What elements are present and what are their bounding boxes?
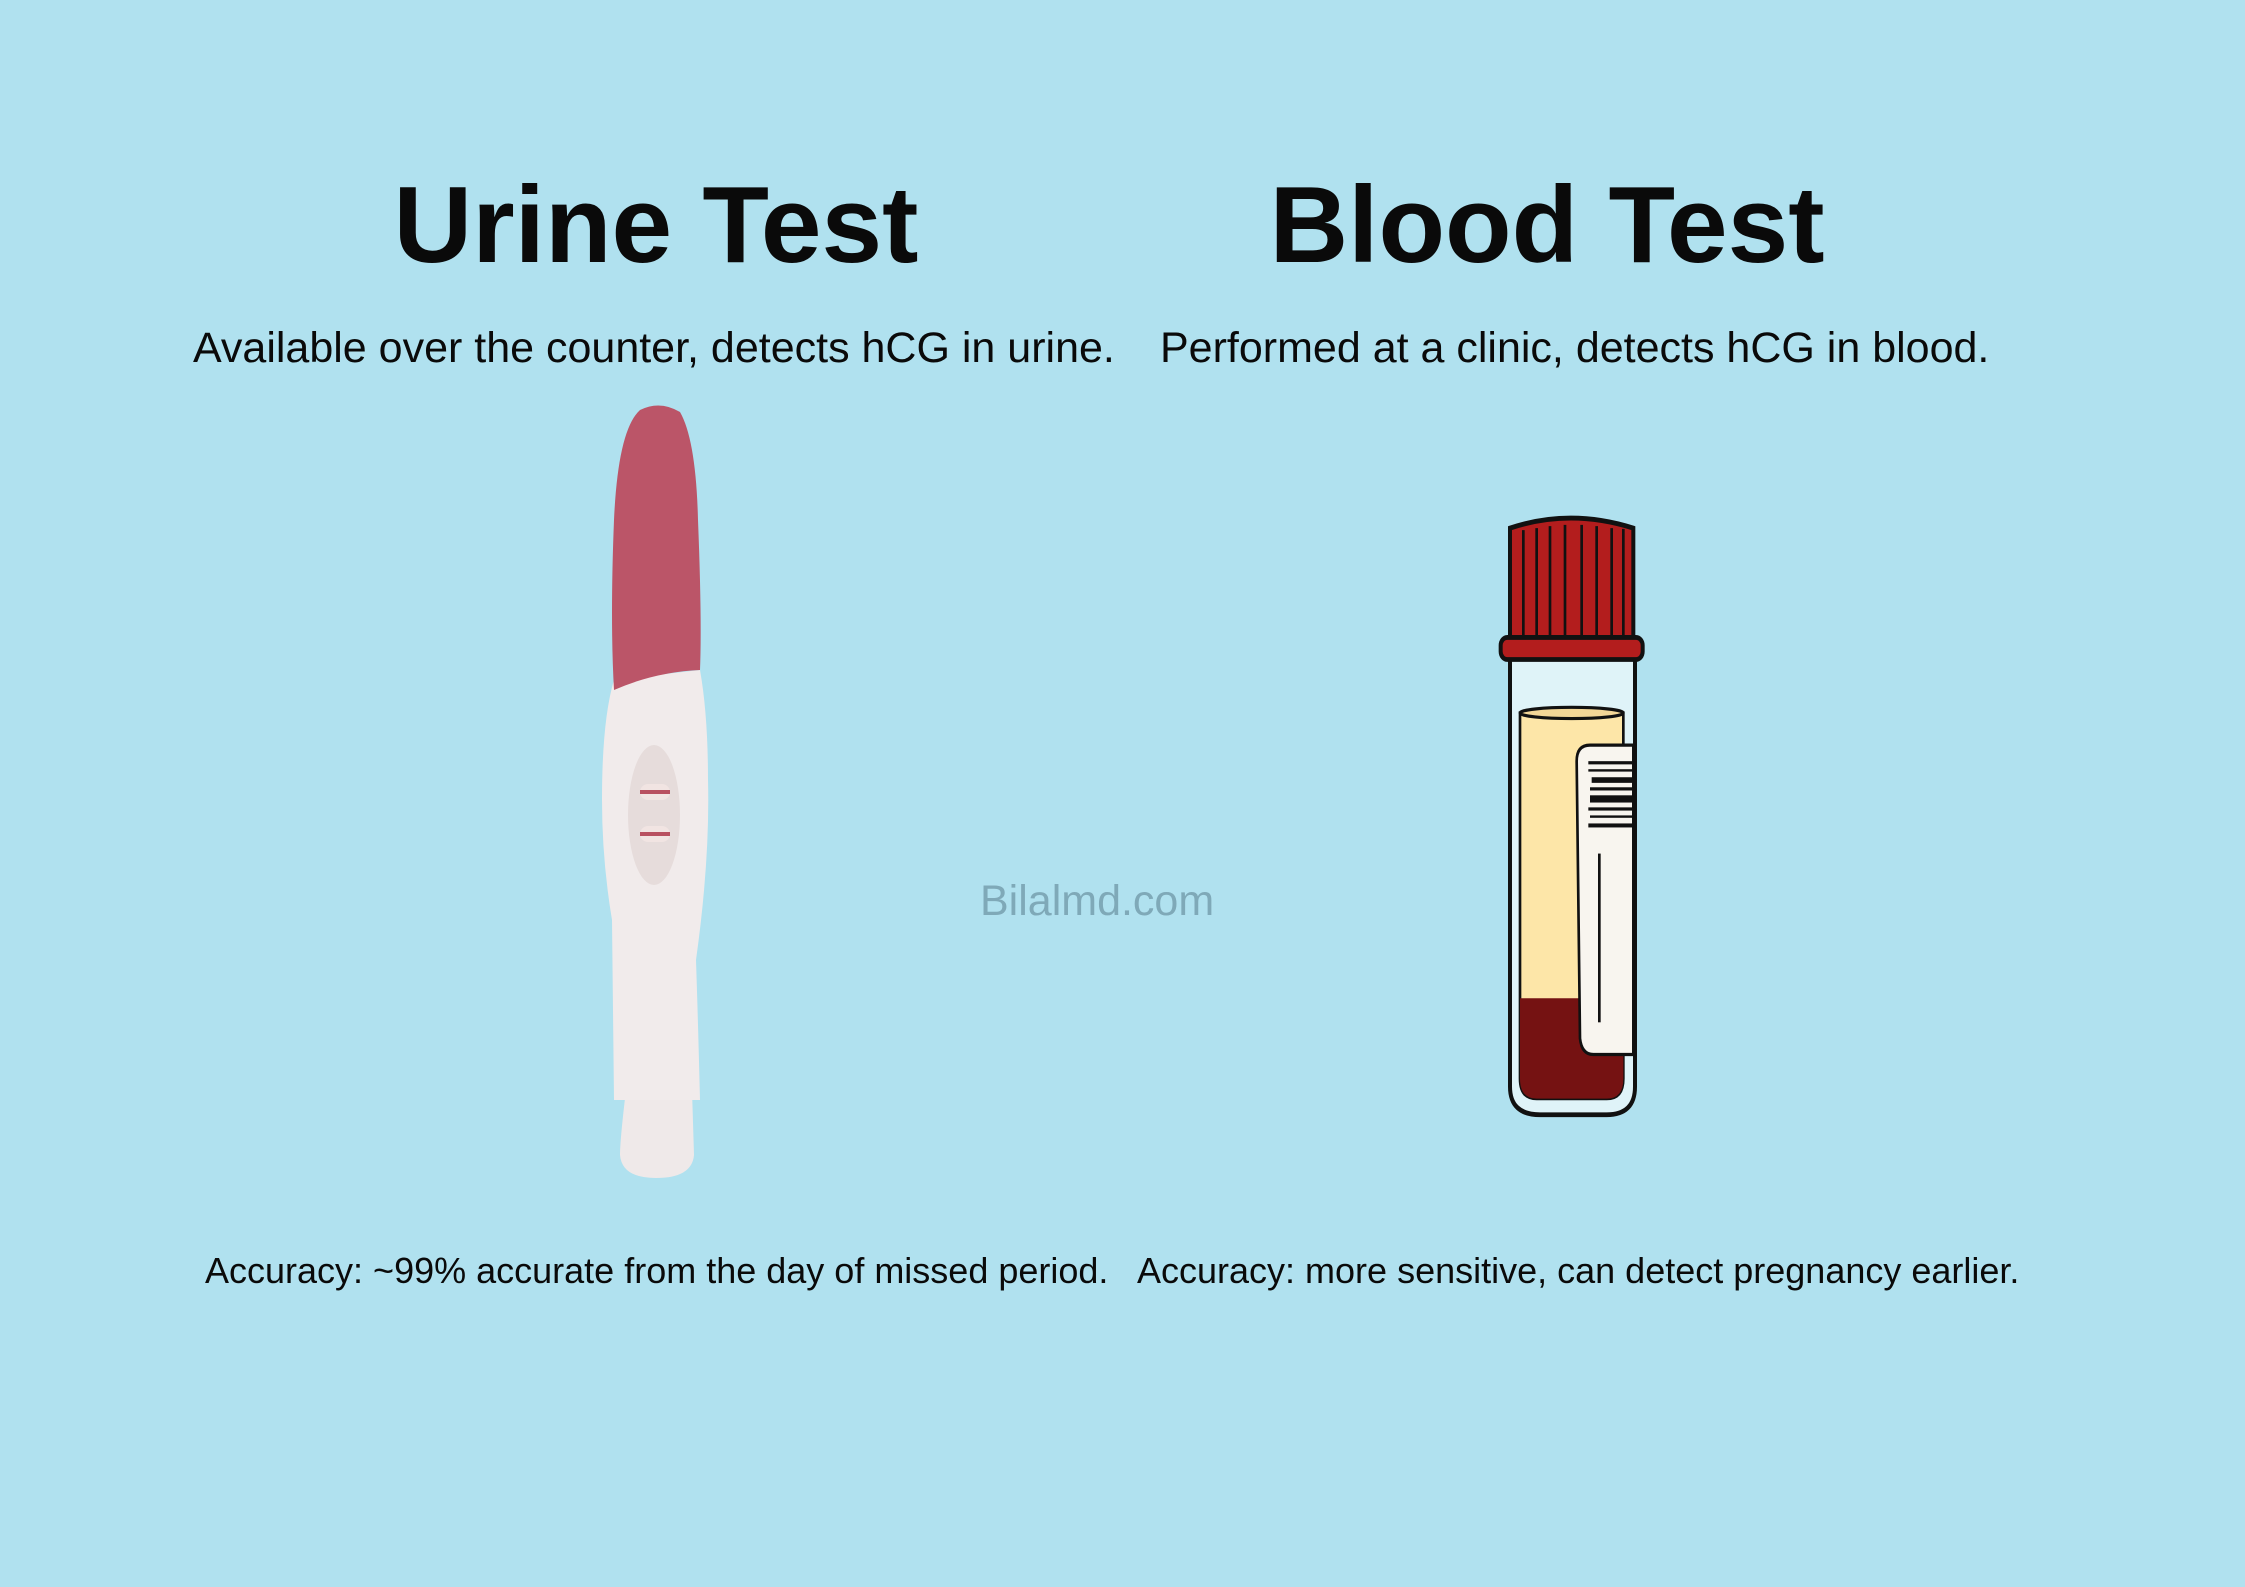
accuracy: blood: Accuracy: more sensitive, can detect pregnancy earlier. [1137, 1250, 2019, 1291]
subtitle: blood: Performed at a clinic, detects hCG in blood. [1160, 324, 1989, 372]
title: blood test: Blood Test [1269, 164, 1825, 286]
icon: blood tube [1498, 516, 1645, 1118]
icon: pregnancy test stick [602, 406, 708, 1178]
subtitle: urine: Available over the counter, detects hCG in urine. [193, 324, 1115, 372]
watermark: Bilalmd.com [980, 877, 1214, 925]
accuracy: urine: Accuracy: ~99% accurate from the day of missed period. [205, 1250, 1108, 1291]
title: urine test: Urine Test [394, 164, 918, 286]
